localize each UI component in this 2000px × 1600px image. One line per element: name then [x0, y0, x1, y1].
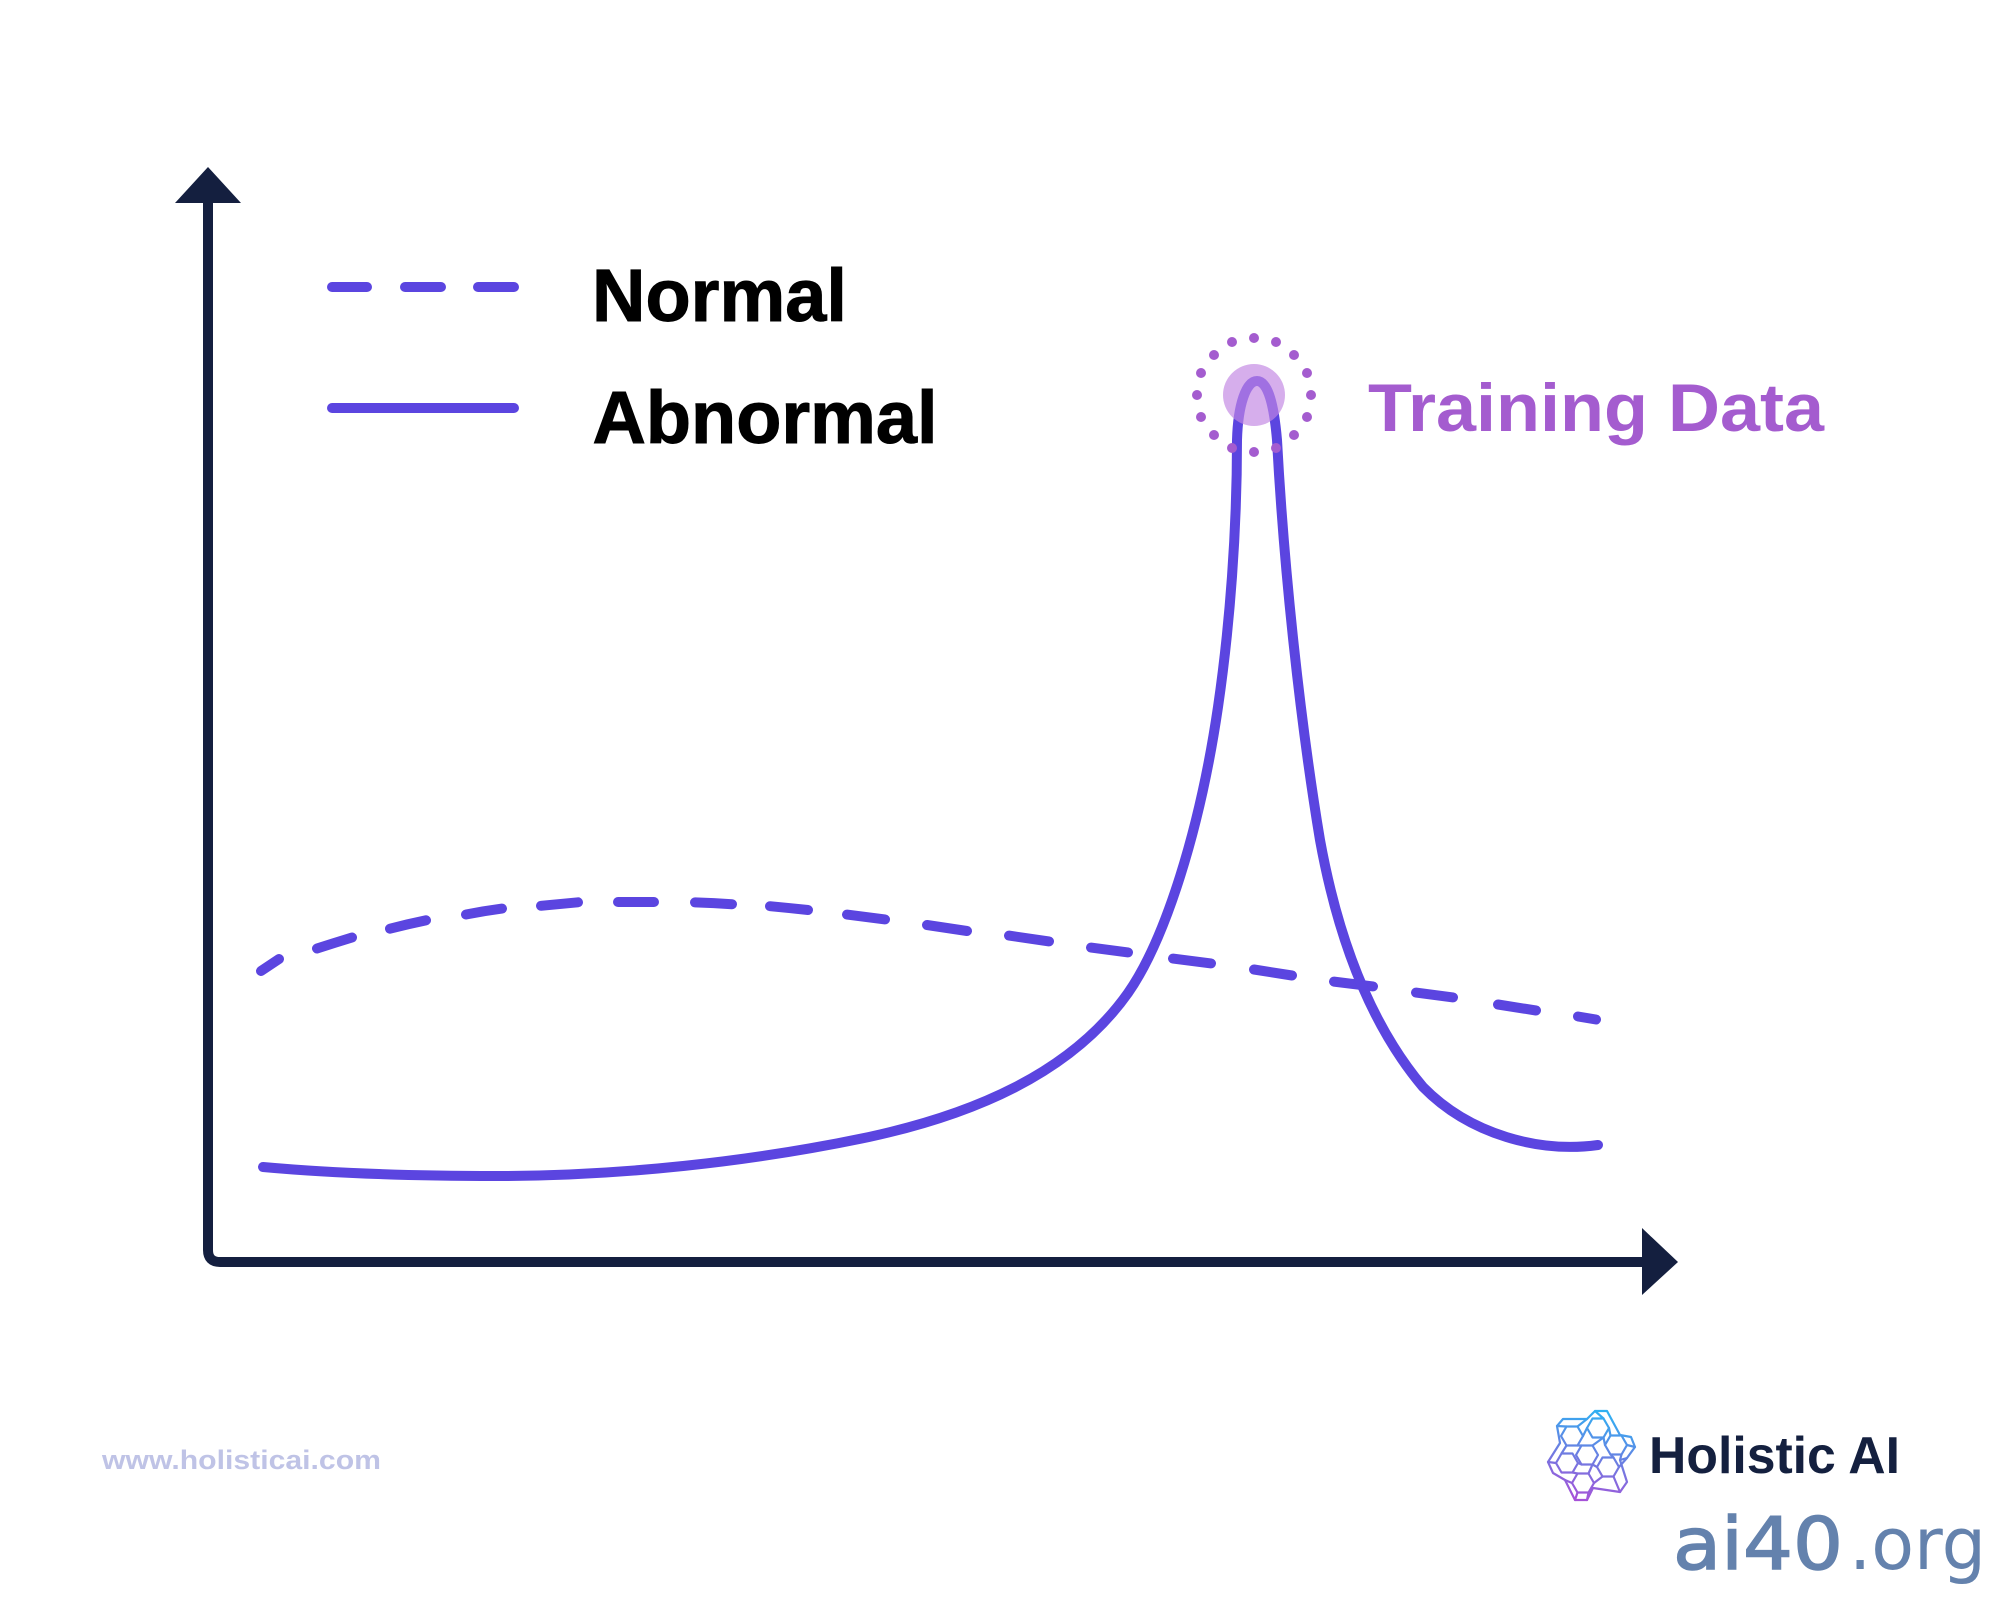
legend: abnormal solid sample [332, 403, 514, 413]
ai40 watermark [1673, 1502, 1986, 1586]
normal dashed curve [261, 902, 1596, 1020]
highlight circle [1223, 364, 1285, 426]
legend: abnormal label: Abnormal [592, 376, 938, 459]
arrow: y axis [175, 167, 241, 203]
legend: normal label: Normal [592, 254, 847, 337]
training data label: Training Data [1368, 370, 1825, 446]
ai40 watermark: .org [1849, 1502, 1986, 1586]
dotted ring [1192, 333, 1316, 457]
abnormal solid curve [263, 381, 1598, 1176]
legend [332, 254, 938, 459]
arrow: x axis [1642, 1228, 1678, 1295]
legend: normal dashed sample [332, 282, 514, 292]
brand name: Holistic AI [1649, 1427, 1900, 1485]
website url: www.holisticai.com [101, 1445, 381, 1475]
chart axes [175, 167, 1678, 1295]
icon: holistic ai logo [1548, 1411, 1635, 1500]
ai40 watermark: ai40 [1673, 1502, 1843, 1586]
training data marker [1192, 333, 1316, 457]
